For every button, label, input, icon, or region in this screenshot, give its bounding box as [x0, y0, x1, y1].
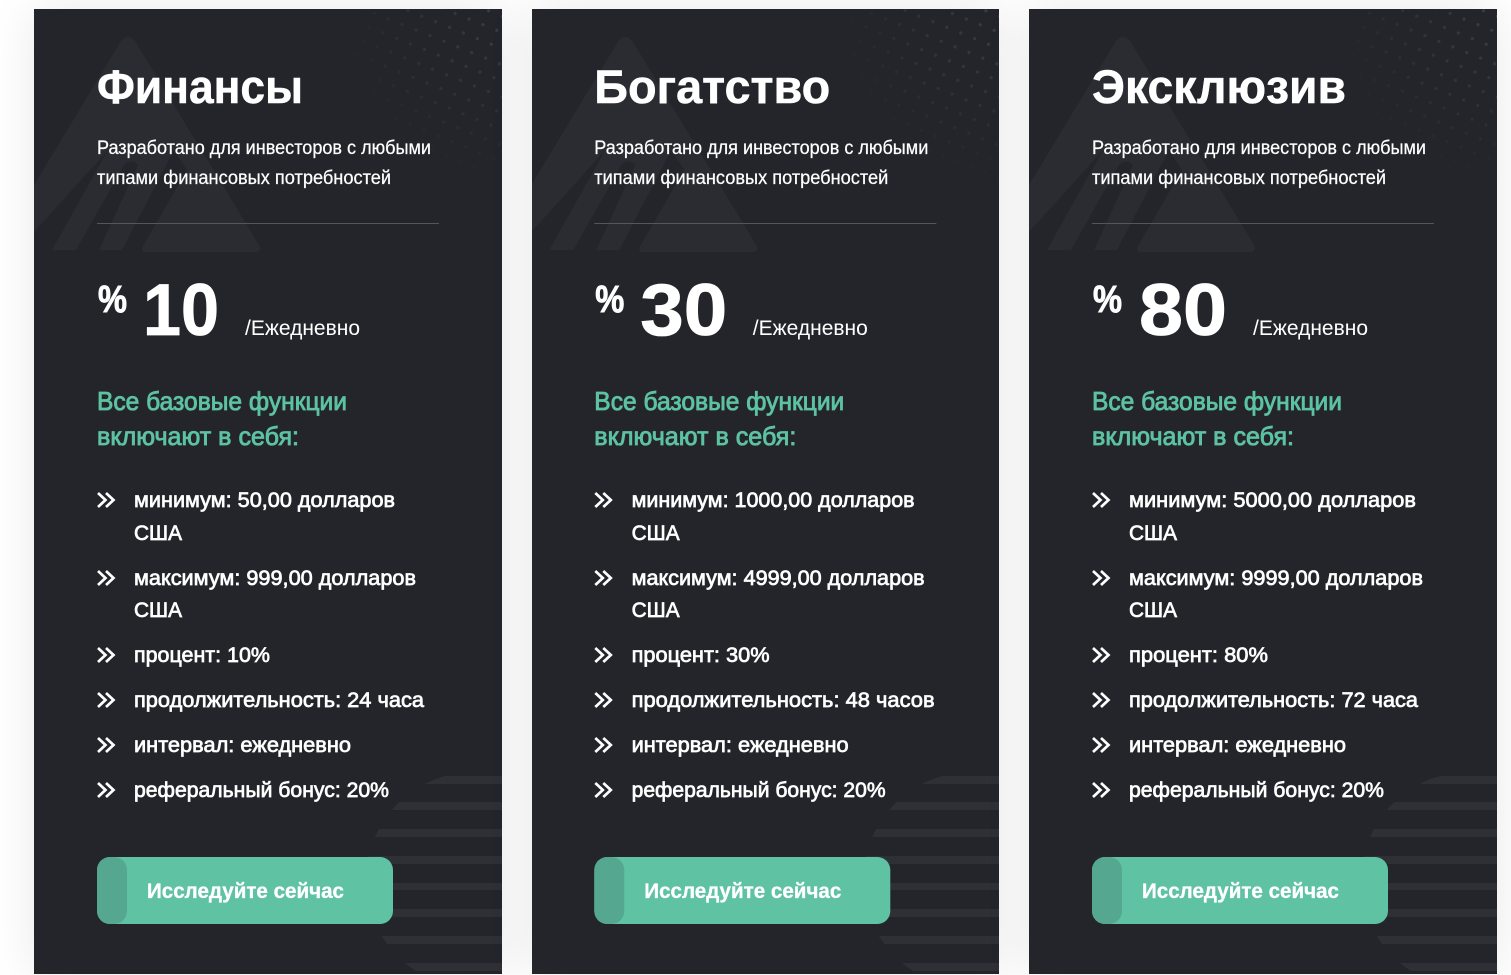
features list: интервал: ежедневно	[1129, 734, 1346, 757]
features list: США	[1129, 599, 1177, 622]
features list	[595, 489, 935, 802]
panel: Эксклюзив	[1029, 9, 1497, 974]
heading: Богатство: Богатство	[594, 60, 830, 113]
rate: 10% daily: %	[98, 279, 127, 321]
panel: Богатство	[532, 9, 999, 974]
features heading: включают в себя:	[1092, 421, 1294, 451]
description: типами финансовых потребностей	[97, 168, 391, 189]
features list: максимум: 999,00 долларов	[134, 567, 416, 590]
description	[97, 138, 431, 189]
description: типами финансовых потребностей	[1092, 168, 1386, 189]
features list: минимум: 5000,00 долларов	[1129, 489, 1416, 512]
rate: 80% daily	[1093, 270, 1368, 351]
features list	[98, 489, 424, 802]
features list: реферальный бонус: 20%	[1129, 779, 1384, 802]
button	[594, 857, 890, 924]
features list: интервал: ежедневно	[632, 734, 849, 757]
button: Исследуйте сейчас	[644, 880, 842, 903]
rate: 30% daily: /Ежедневно	[753, 317, 868, 340]
button	[97, 857, 393, 924]
features list	[1093, 489, 1423, 802]
description: Разработано для инвесторов с любыми	[594, 138, 928, 159]
features list: реферальный бонус: 20%	[632, 779, 886, 802]
features heading: включают в себя:	[594, 421, 796, 451]
button	[1092, 857, 1388, 924]
rate: 30% daily: %	[595, 279, 624, 321]
button: Исследуйте сейчас	[1142, 880, 1339, 903]
rate: 80% daily: %	[1093, 279, 1122, 321]
features list: продолжительность: 48 часов	[632, 689, 935, 712]
features list: США	[1129, 522, 1177, 545]
description: типами финансовых потребностей	[594, 168, 888, 189]
description: Разработано для инвесторов с любыми	[97, 138, 431, 159]
features heading: Все базовые функции	[1092, 386, 1342, 416]
rate: 30% daily: 30	[640, 270, 727, 351]
features list: процент: 10%	[134, 644, 270, 667]
description	[1092, 138, 1426, 189]
rate: 10% daily	[98, 270, 360, 351]
features list: США	[632, 522, 680, 545]
features list: процент: 30%	[632, 644, 770, 667]
description	[594, 138, 928, 189]
features list: интервал: ежедневно	[134, 734, 351, 757]
description: Разработано для инвесторов с любыми	[1092, 138, 1426, 159]
button: Исследуйте сейчас	[147, 880, 344, 903]
rate: 10% daily: /Ежедневно	[245, 317, 360, 340]
features heading: Все базовые функции	[594, 386, 844, 416]
features list: процент: 80%	[1129, 644, 1268, 667]
features list: реферальный бонус: 20%	[134, 779, 389, 802]
features list: США	[134, 522, 182, 545]
features list: максимум: 4999,00 долларов	[632, 567, 925, 590]
features heading	[594, 386, 844, 451]
heading: Эксклюзив: Эксклюзив	[1092, 60, 1346, 113]
rate: 80% daily: 80	[1139, 270, 1227, 351]
features heading	[97, 386, 347, 451]
features list: минимум: 50,00 долларов	[134, 489, 395, 512]
rate: 10% daily: 10	[143, 270, 219, 351]
rate: 30% daily	[595, 270, 868, 351]
features list: продолжительность: 24 часа	[134, 689, 424, 712]
features list: США	[134, 599, 182, 622]
panel: Финансы	[34, 9, 502, 974]
features list: США	[632, 599, 680, 622]
heading: Финансы: Финансы	[97, 60, 303, 113]
features list: продолжительность: 72 часа	[1129, 689, 1418, 712]
features list: максимум: 9999,00 долларов	[1129, 567, 1423, 590]
features list: минимум: 1000,00 долларов	[632, 489, 915, 512]
features heading: включают в себя:	[97, 421, 299, 451]
rate: 80% daily: /Ежедневно	[1253, 317, 1368, 340]
features heading: Все базовые функции	[97, 386, 347, 416]
features heading	[1092, 386, 1342, 451]
